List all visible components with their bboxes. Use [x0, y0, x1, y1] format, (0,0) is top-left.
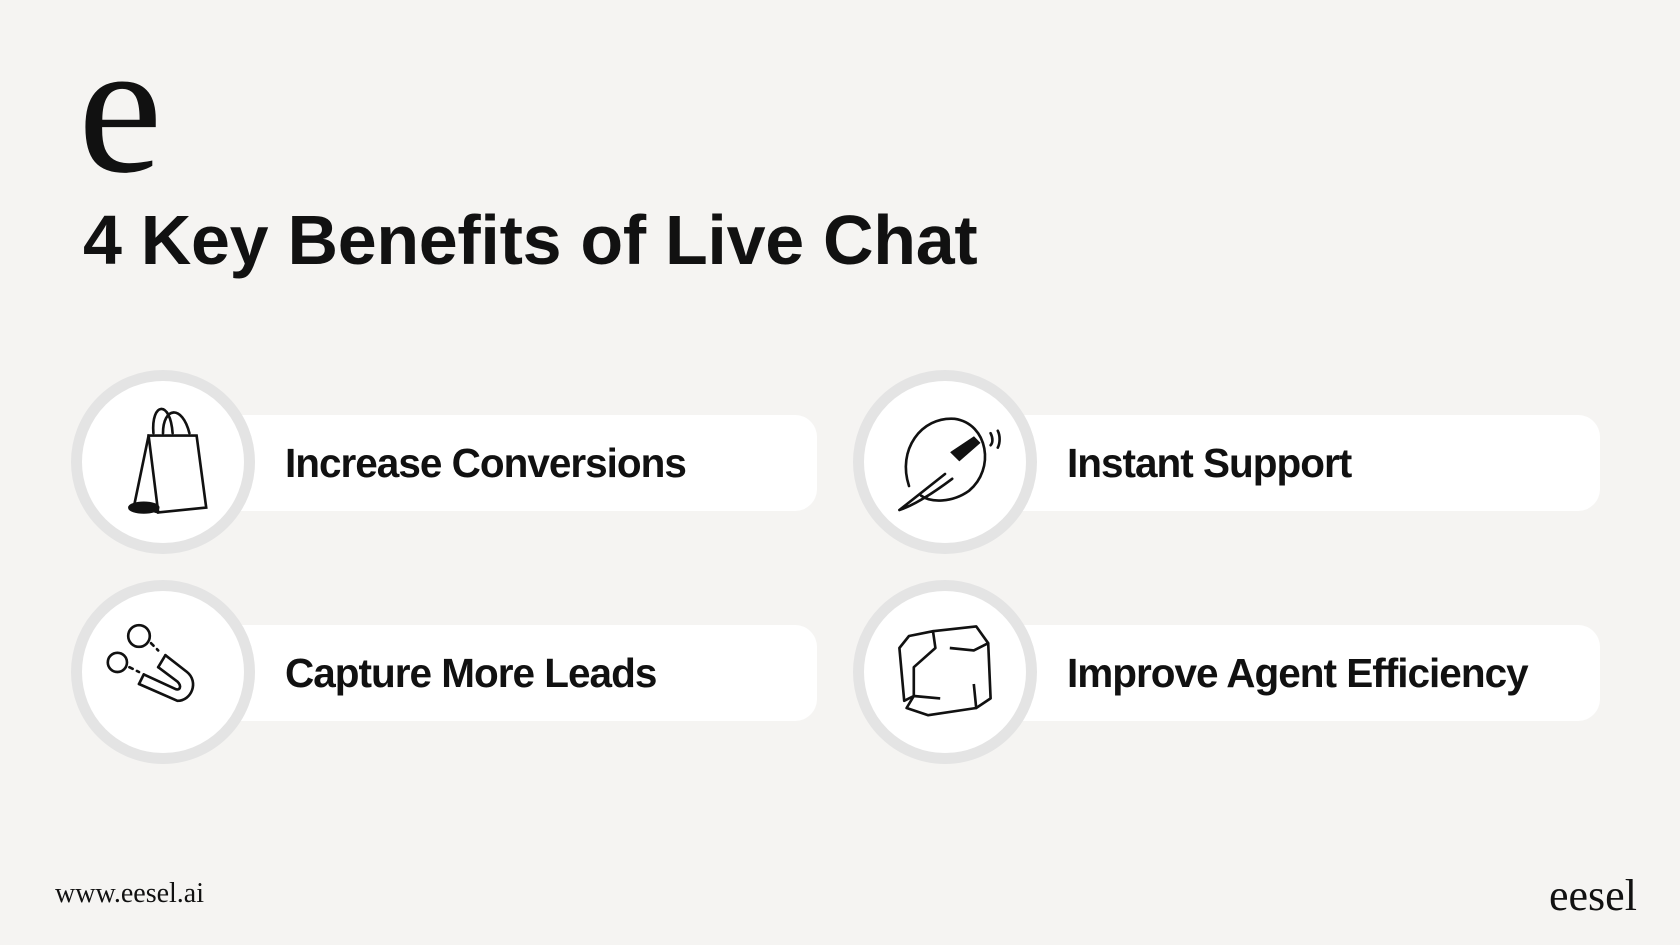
- logo: e: e: [78, 3, 162, 213]
- icon: rocket circle: [853, 370, 1037, 554]
- pill label: [214, 625, 817, 721]
- pill label: [996, 415, 1600, 511]
- icon: shopping bag: [71, 370, 255, 554]
- card: Capture More Leads: [71, 580, 817, 764]
- icon: magnet with coins: [71, 580, 255, 764]
- pill label: [996, 625, 1600, 721]
- footer: eesel wordmark: eesel: [1549, 871, 1637, 920]
- icon: joined hands: [853, 580, 1037, 764]
- pill label: Increase Conversions: [285, 440, 686, 486]
- pill label: Capture More Leads: [285, 650, 656, 696]
- title: 4 Key Benefits of Live Chat: [83, 201, 977, 279]
- footer: website: www.eesel.ai: [55, 878, 204, 909]
- pill label: [214, 415, 817, 511]
- card: Instant Support: [853, 370, 1600, 554]
- card: Increase Conversions: [71, 370, 817, 554]
- card: Improve Agent Efficiency: [853, 580, 1600, 764]
- pill label: Improve Agent Efficiency: [1067, 650, 1528, 696]
- pill label: Instant Support: [1067, 440, 1351, 486]
